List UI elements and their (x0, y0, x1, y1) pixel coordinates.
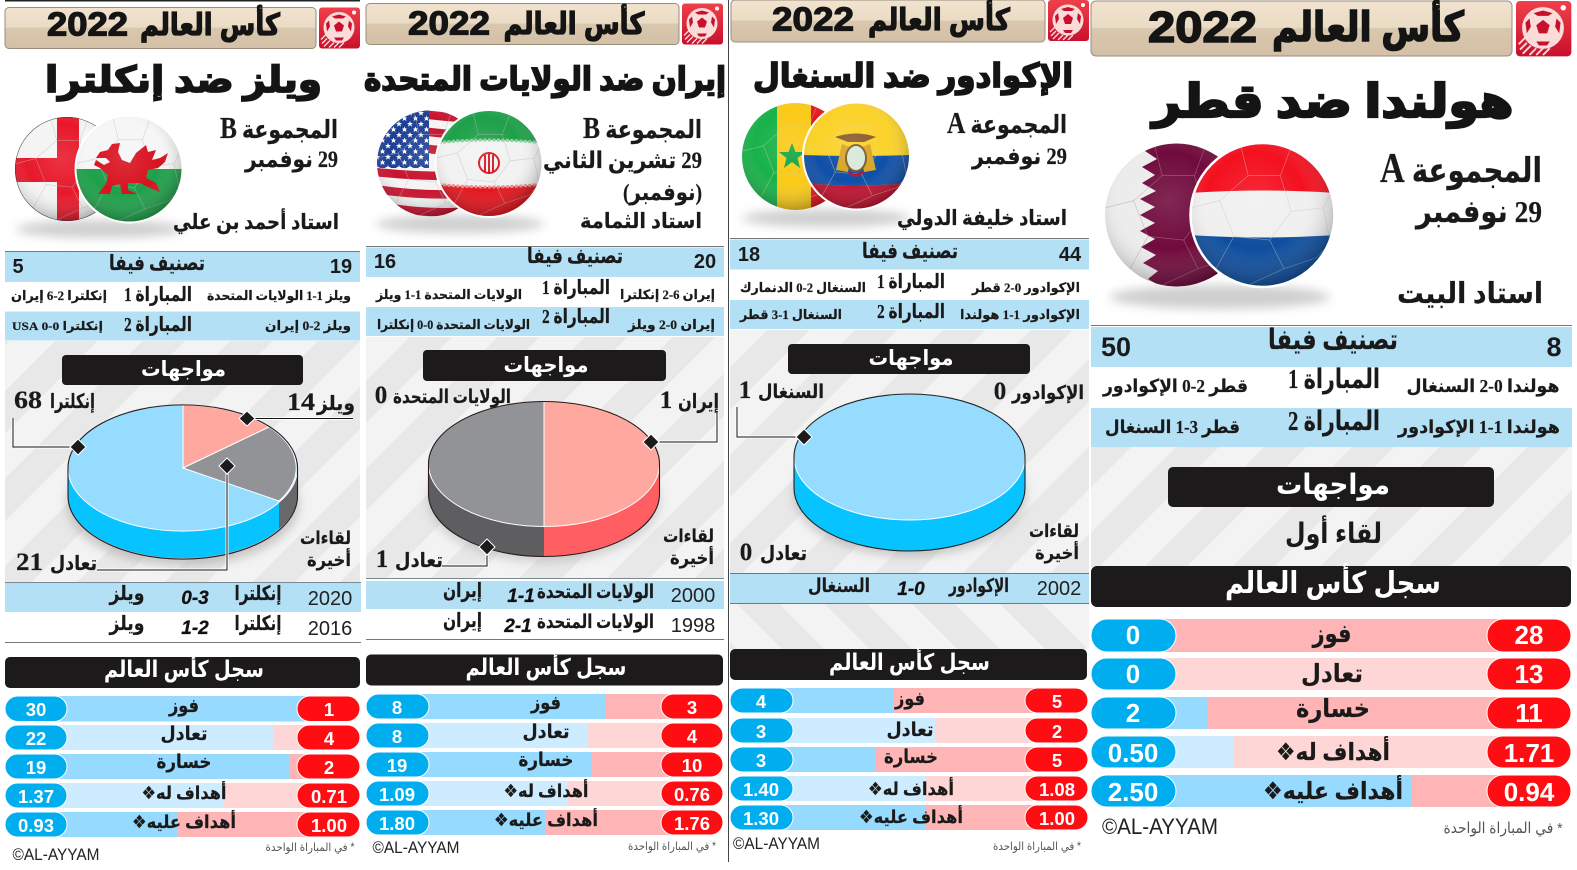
recent meeting 2002 (730, 573, 1089, 604)
stat row: losses (366, 750, 723, 777)
recent meeting 2016: إنكلترا (234, 613, 282, 635)
stat row: losses: 2 (1126, 698, 1140, 728)
stat row: wins: 8 (392, 697, 402, 718)
stat row: draws: 22 (26, 728, 46, 749)
match 1 row: المباراة 1 (542, 277, 610, 299)
match 1 row: المباراة 1 (877, 271, 945, 293)
stat row: wins: 30 (26, 699, 46, 720)
shadow under balls (1110, 285, 1330, 309)
stat row: draws: 13 (1515, 659, 1543, 689)
heading: World Cup record (730, 646, 1087, 680)
recent meeting 2002: 1-0 (897, 579, 925, 600)
callout: USA wins (375, 382, 511, 409)
stat row: losses: 3 (756, 750, 766, 771)
FIFA ranking row: تصنيف فيفا (527, 244, 623, 268)
header banner: 2022 (47, 6, 128, 42)
recent meeting 2020: 2020 (308, 588, 352, 610)
callout: draws (16, 458, 235, 576)
stat row: losses: 5 (1052, 750, 1062, 771)
stat row: losses (1091, 696, 1571, 729)
stat row: draws: 3 (756, 721, 766, 742)
group: المجموعة A (1380, 146, 1542, 192)
callout: draws (740, 539, 807, 566)
heading: World Cup record: سجل كأس العالم (829, 646, 990, 675)
stat row: goals for: أهداف له❖ (1276, 736, 1390, 766)
callout: Iran wins: 1 (660, 387, 672, 414)
FIFA ranking row (730, 238, 1089, 270)
stat row: goals against: 0.94 (1504, 777, 1555, 807)
panel: Wales vs England (5, 5, 361, 864)
match 1 row: المباراة 1 (1288, 364, 1380, 395)
stat row: goals for: أهداف له❖ (504, 779, 588, 801)
stat row: losses: خسارة (518, 750, 574, 771)
stat row: losses: خسارة (884, 747, 938, 768)
stat row: draws: 4 (687, 726, 698, 747)
FIFA ranking row: 5 (12, 256, 24, 278)
head-to-head section background (1091, 447, 1572, 567)
stat row: wins: فوز (530, 693, 561, 714)
match 2 row (1091, 406, 1572, 447)
first meeting note: لقاء أول (1285, 515, 1382, 550)
match 1 row: إنكلترا 2-6 إيران (11, 288, 107, 303)
stat row: goals against (1091, 775, 1571, 807)
stat row: draws: تعادل (1301, 661, 1363, 688)
FIFA ranking row: 8 (1546, 332, 1562, 362)
FIFA ranking row (1091, 325, 1572, 367)
group: المجموعة A (947, 105, 1067, 140)
panel separator (728, 0, 729, 862)
stat row: goals for: 1.37 (18, 786, 54, 807)
stat row: goals against: 0.93 (18, 815, 54, 836)
stat row: goals against: أهداف عليه❖ (859, 805, 963, 827)
stat row: goals for (366, 779, 723, 806)
icon: England ball (15, 117, 96, 221)
heading: head-to-head: مواجهات (1276, 469, 1390, 501)
FIFA ranking row: تصنيف فيفا (862, 239, 958, 263)
heading: World Cup record: سجل كأس العالم (466, 651, 626, 680)
FIFA ranking row (366, 244, 724, 277)
heading: head-to-head: مواجهات (504, 354, 588, 377)
callout: Iran wins (643, 387, 719, 450)
stat row: goals for: 0.50 (1108, 738, 1158, 768)
icon: Iran ball (434, 108, 544, 220)
stat row: goals for: 1.09 (379, 784, 415, 805)
callout: Ecuador wins: الإكوادور (1011, 383, 1084, 404)
FIFA ranking row: 50 (1101, 332, 1131, 362)
date: 29 تشرين الثاني (543, 148, 702, 174)
match 2 row (730, 300, 1089, 329)
stat row: goals against: 1.80 (379, 813, 415, 834)
recent meeting 1998: 2-1 (503, 616, 532, 637)
match 1 row: السنغال 2-0 الدنمارك (740, 280, 866, 295)
pie chart (428, 402, 660, 562)
match 1 row (11, 284, 351, 306)
stat row: goals for: أهداف له❖ (142, 781, 226, 803)
header banner: كأس العالم (868, 0, 1010, 38)
stat row: wins: 3 (687, 697, 697, 718)
match 1 row: المباراة 1 (124, 284, 192, 306)
match title: إيران ضد الولايات المتحدة (364, 61, 726, 99)
stadium: استاد الثمامة (580, 209, 702, 233)
icon: football logo (319, 8, 360, 48)
callout: Wales wins (239, 389, 355, 426)
heading: head-to-head (423, 350, 666, 381)
stat row: losses: 10 (682, 755, 702, 776)
date: 29 نوفمبر (971, 144, 1067, 170)
recent meetings label (1029, 521, 1079, 564)
header banner: كأس العالم (140, 5, 280, 43)
recent meeting 2020 (5, 582, 361, 612)
copyright: ©AL-AYYAM (1102, 814, 1218, 839)
recent meetings label: أخيرة (1035, 541, 1079, 564)
stat row: losses: 2 (324, 757, 334, 778)
panel: Ecuador vs Senegal (730, 0, 1089, 854)
match 2 row: هولندا 1-1 الإكوادور (1397, 417, 1560, 438)
heading: World Cup record: سجل كأس العالم (1225, 563, 1441, 601)
copyright: ©AL-AYYAM (12, 845, 100, 864)
stat row: goals against: 1.00 (311, 815, 347, 836)
date: (نوفمبر) (623, 180, 702, 206)
stat row: goals for: 0.71 (311, 786, 347, 807)
match 2 row: ويلز 2-0 إيران (265, 318, 351, 333)
date: 29 نوفمبر (244, 147, 338, 173)
icon: football logo (1516, 1, 1571, 56)
FIFA ranking row: 19 (330, 256, 352, 278)
head-to-head section background (5, 341, 360, 582)
icon: football logo (1048, 0, 1089, 41)
recent meeting 2002: السنغال (808, 576, 870, 597)
match 2 row: إنكلترا 0-0 USA (12, 319, 103, 333)
match 1 row (1102, 364, 1560, 397)
copyright: ©AL-AYYAM (733, 834, 820, 853)
header banner: 2022 (1148, 3, 1257, 52)
stat row: draws: تعادل (522, 722, 570, 743)
stat row: draws (1091, 658, 1571, 690)
match 2 row: الولايات المتحدة 0-0 إنكلترا (377, 317, 530, 332)
stat row: draws: 0 (1126, 659, 1140, 689)
stat row: goals against: 1.00 (1039, 808, 1075, 829)
FIFA ranking row: 18 (738, 244, 760, 266)
match title: هولندا ضد قطر (1150, 76, 1514, 128)
recent meeting 2020: إنكلترا (234, 583, 282, 605)
icon: Wales ball (76, 116, 182, 222)
heading: head-to-head (788, 344, 1030, 374)
date: 29 نوفمبر (1414, 194, 1542, 230)
match 2 row: المباراة 2 (124, 314, 192, 336)
recent meetings label (663, 526, 714, 569)
FIFA ranking row: 16 (374, 251, 396, 273)
heading: head-to-head (62, 355, 303, 385)
recent meeting 2016 (5, 613, 361, 643)
heading: World Cup record: سجل كأس العالم (104, 653, 264, 682)
stat row: wins (730, 688, 1088, 713)
callout: England wins: إنكلترا (50, 391, 95, 413)
callout: draws: 1 (376, 546, 388, 573)
stat row: goals against: أهداف عليه❖ (1263, 775, 1403, 805)
recent meeting 1998 (366, 610, 724, 640)
stat row: goals for: 0.76 (674, 784, 710, 805)
match 2 row: المباراة 2 (542, 306, 610, 328)
shadow under balls (376, 215, 544, 233)
callout: Wales wins: 14 (287, 389, 316, 416)
recent meeting 2000: 2000 (671, 585, 715, 607)
panel: Netherlands vs Qatar (1091, 0, 1572, 839)
stat row: wins (1091, 619, 1571, 652)
match title: الإكوادور ضد السنغال (753, 59, 1073, 96)
stat row: goals against: 1.76 (674, 813, 710, 834)
heading: World Cup record (1091, 563, 1571, 607)
shadow under balls (742, 209, 910, 227)
stat row: draws: 2 (1052, 721, 1062, 742)
match 2 row: السنغال 1-3 قطر (739, 307, 842, 322)
callout: USA wins: 0 (375, 382, 387, 409)
stat row: wins: 1 (324, 699, 334, 720)
stat row: wins: 0 (1126, 620, 1140, 650)
stat row: goals for: 1.71 (1504, 738, 1554, 768)
panel: Iran vs USA (364, 4, 726, 857)
shadow under balls (16, 220, 184, 238)
FIFA ranking row: تصنيف فيفا (109, 251, 205, 275)
date (543, 148, 702, 206)
stat row: wins (5, 696, 360, 722)
pie chart (794, 394, 1026, 556)
group: المجموعة B (583, 110, 702, 145)
stat row: wins: فوز (894, 689, 925, 710)
stat row: goals for: أهداف له❖ (868, 777, 954, 799)
recent meeting 2000 (366, 578, 724, 609)
callout: draws: تعادل (50, 553, 97, 575)
stat row: draws (730, 718, 1088, 743)
icon: Senegal ball (742, 103, 826, 210)
FIFA ranking row (5, 251, 360, 282)
stat row: wins: 28 (1515, 620, 1543, 650)
recent meeting 2000: الولايات المتحدة (537, 582, 654, 603)
stat row: wins: فوز (1311, 621, 1352, 649)
footnote: * في المباراة الواحدة (628, 841, 716, 854)
callout: draws: تعادل (395, 550, 443, 572)
stat row: wins (366, 693, 723, 719)
pie chart (67, 405, 299, 566)
recent meetings label: أخيرة (307, 548, 351, 571)
recent meeting 2016: 2016 (308, 618, 352, 640)
stat row: goals against: أهداف عليه❖ (132, 810, 236, 832)
recent meeting 1998: الولايات المتحدة (537, 612, 654, 633)
recent meetings label (300, 528, 351, 571)
head-to-head section background (730, 330, 1089, 649)
header banner (731, 0, 1045, 42)
recent meeting 2016: ويلز (109, 613, 144, 635)
recent meeting 2020: ويلز (109, 583, 144, 605)
stat row: draws (366, 722, 723, 748)
icon: football logo (682, 4, 723, 44)
stat row: draws: تعادل (160, 724, 208, 745)
stat row: goals for (1091, 736, 1571, 768)
header banner: كأس العالم (1272, 0, 1464, 51)
copyright: ©AL-AYYAM (372, 838, 460, 857)
match 2 row (5, 312, 360, 340)
match 1 row: إيران 6-2 إنكلترا (620, 287, 715, 302)
stat row: draws (5, 724, 360, 750)
recent meeting 2000: 1-1 (507, 586, 535, 607)
icon: Netherlands ball (1189, 141, 1336, 289)
recent meetings label: أخيرة (670, 546, 714, 569)
callout: Wales wins: ويلز (316, 393, 355, 415)
stat row: goals against (730, 805, 1088, 830)
callout: England wins: 68 (14, 387, 42, 414)
heading: head-to-head: مواجهات (141, 358, 226, 381)
recent meeting 2016: 1-2 (181, 618, 209, 639)
footnote: * في المباراة الواحدة (266, 842, 355, 855)
match 2 row: قطر 3-1 السنغال (1105, 417, 1240, 438)
recent meetings label: لقاءات (300, 528, 351, 548)
FIFA ranking row: 44 (1059, 244, 1082, 266)
match 1 row: الإكوادور 0-2 قطر (971, 280, 1080, 295)
match 1 row: هولندا 0-2 السنغال (1406, 376, 1560, 397)
footnote: * في المباراة الواحدة (993, 841, 1081, 854)
callout: Iran wins: إيران (678, 391, 719, 413)
stat row: losses (5, 752, 360, 779)
recent meetings label: لقاءات (663, 526, 714, 546)
icon: Ecuador ball (802, 102, 911, 212)
stat row: losses: خسارة (1296, 696, 1370, 723)
stat row: goals for (730, 776, 1088, 801)
match 1 row (375, 277, 715, 302)
stat row: goals for (5, 781, 360, 808)
footnote: * في المباراة الواحدة (1444, 820, 1563, 838)
recent meeting 2020: 0-3 (181, 588, 209, 609)
group: المجموعة B (220, 110, 338, 145)
header banner: 2022 (408, 4, 490, 42)
stat row: draws: تعادل (886, 720, 934, 741)
recent meeting 1998: 1998 (671, 615, 715, 637)
stat row: losses: خسارة (156, 752, 212, 773)
heading: head-to-head (1168, 467, 1494, 507)
match 1 row: ويلز 1-1 الولايات المتحدة (207, 288, 351, 303)
match 1 row: قطر 2-0 الإكوادور (1102, 376, 1248, 397)
stat row: goals against: 1.30 (743, 808, 779, 829)
callout: Senegal wins: السنغال (758, 382, 824, 403)
recent meeting 2000: إيران (443, 580, 482, 602)
heading: head-to-head: مواجهات (868, 347, 954, 370)
head-to-head section background (366, 337, 724, 578)
recent meeting 2002: 2002 (1037, 578, 1081, 600)
match 2 row: الإكوادور 1-1 هولندا (960, 307, 1080, 322)
callout: Senegal wins: 1 (739, 377, 751, 404)
match 1 row (740, 271, 1080, 295)
match 2 row (366, 306, 724, 336)
match 2 row: إيران 0-2 ويلز (627, 317, 715, 332)
icon: USA ball (377, 110, 458, 216)
stat row: losses: 19 (387, 755, 407, 776)
recent meetings label: لقاءات (1029, 521, 1079, 541)
match 2 row: المباراة 2 (877, 301, 945, 323)
callout: USA wins: الولايات المتحدة (393, 387, 511, 408)
header banner (5, 5, 316, 48)
heading: World Cup record (5, 653, 360, 688)
stat row: goals against: 2.50 (1108, 777, 1158, 807)
callout: England wins (13, 387, 95, 455)
header banner: كأس العالم (504, 4, 645, 42)
stat row: goals against (366, 808, 723, 835)
stat row: draws: 8 (392, 726, 402, 747)
callout: draws: 21 (16, 549, 43, 576)
FIFA ranking row: تصنيف فيفا (1268, 325, 1398, 356)
top rule (5, 0, 360, 2)
callout: draws: تعادل (760, 543, 807, 565)
stadium: استاد أحمد بن علي (173, 207, 339, 234)
stat row: goals against: أهداف عليه❖ (494, 808, 598, 830)
header banner: 2022 (772, 0, 854, 38)
callout: Ecuador wins: 0 (994, 378, 1006, 405)
stat row: wins: فوز (168, 696, 199, 717)
header banner (366, 4, 679, 44)
stat row: wins: 4 (756, 691, 767, 712)
callout: draws: 0 (740, 539, 752, 566)
callout: Ecuador wins (994, 378, 1084, 405)
recent meeting 1998: إيران (443, 610, 482, 632)
stadium: استاد البيت (1397, 278, 1543, 310)
stat row: draws: 4 (324, 728, 335, 749)
heading: World Cup record (366, 651, 723, 686)
match title: ويلز ضد إنكلترا (45, 60, 322, 101)
stat row: goals against (5, 810, 360, 837)
stadium: استاد خليفة الدولي (897, 206, 1067, 230)
match 2 row: المباراة 2 (1288, 406, 1380, 437)
stat row: goals for: 1.08 (1039, 779, 1075, 800)
FIFA ranking row: 20 (694, 251, 716, 273)
callout: draws (376, 539, 495, 573)
stat row: losses: 19 (26, 757, 46, 778)
callout: Senegal wins (737, 377, 824, 445)
stat row: wins: 5 (1052, 691, 1062, 712)
recent meeting 2002: الإكوادور (948, 576, 1009, 597)
stat row: losses: 11 (1515, 698, 1543, 728)
stat row: losses (730, 747, 1088, 772)
stat row: goals for: 1.40 (743, 779, 779, 800)
match 1 row: الولايات المتحدة 1-1 ويلز (375, 287, 522, 302)
icon: Qatar ball (1105, 144, 1218, 286)
header banner (1091, 0, 1512, 56)
